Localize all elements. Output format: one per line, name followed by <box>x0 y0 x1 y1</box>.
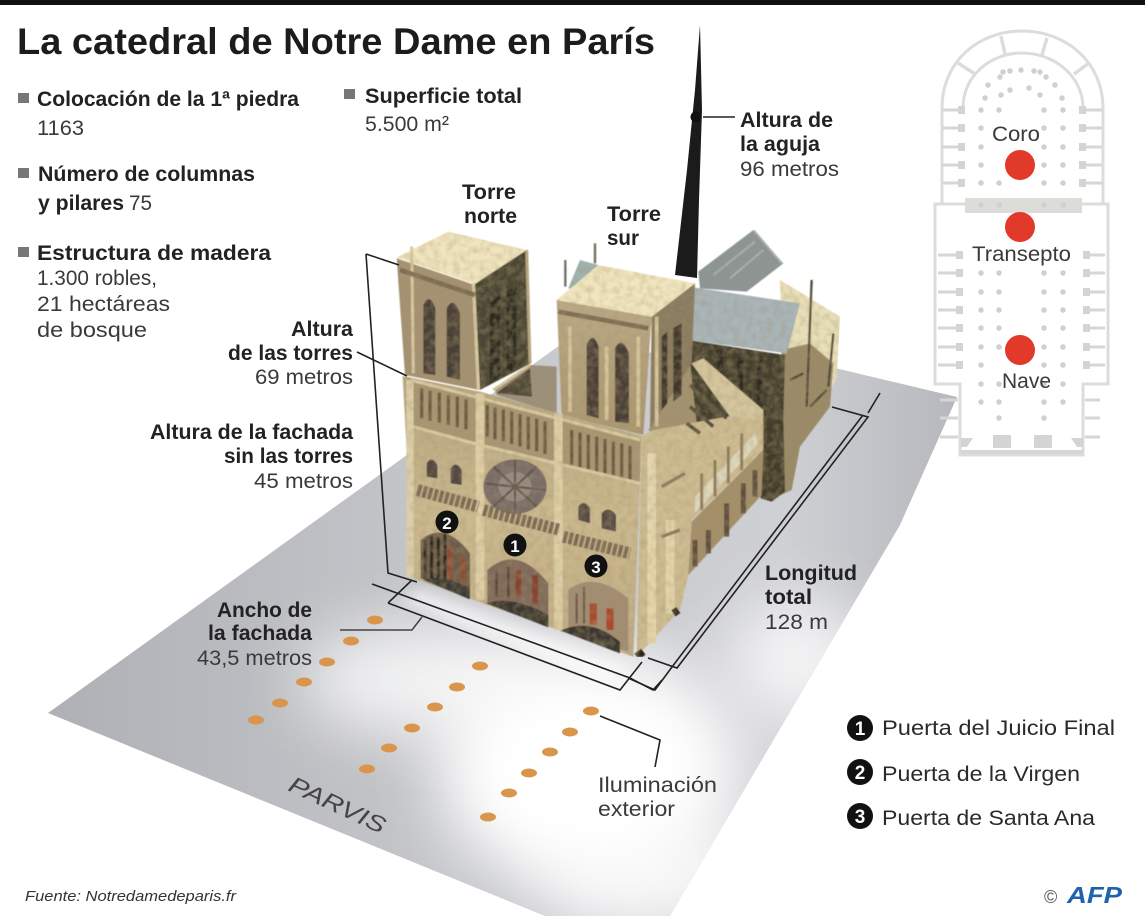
label: total length: 128 m <box>765 610 828 634</box>
label: exterior lighting <box>598 773 717 821</box>
nave roof <box>688 287 800 353</box>
label: facade width <box>197 599 312 670</box>
label: north tower: Torre <box>462 181 516 204</box>
label: south tower: Torre <box>607 203 661 226</box>
copyright and AFP logo: AFP <box>1066 882 1123 908</box>
label: tower height <box>228 318 353 389</box>
label: total length: Longitud <box>765 562 857 585</box>
cathedral 3D model <box>397 230 840 657</box>
label: spire height <box>740 109 839 181</box>
label: facade height: 45 metros <box>254 469 353 493</box>
fact: first stone <box>18 88 299 140</box>
south side of nave <box>637 358 763 657</box>
source: Fuente: Notredamedeparis.fr <box>25 888 237 905</box>
fact: timber structure: de bosque <box>37 318 147 342</box>
label: exterior lighting: exterior <box>598 797 675 821</box>
plan markers and labels: Coro <box>992 122 1040 146</box>
transept dark column <box>757 417 785 502</box>
fact: columns: y pilares <box>38 192 124 215</box>
plan markers and labels: Nave <box>1002 369 1051 393</box>
label: PARVIS: PARVIS <box>285 771 391 839</box>
label: facade height: sin las torres <box>224 445 353 468</box>
south tower <box>557 265 695 435</box>
fact: columns: Número de columnas <box>38 163 255 186</box>
label: exterior lighting: Iluminación <box>598 773 717 797</box>
label: south tower: sur <box>607 227 639 250</box>
label: spire height: la aguja <box>740 133 820 156</box>
gallery of arches <box>422 388 630 482</box>
label: north tower: norte <box>464 205 517 228</box>
fact: columns: 75 <box>129 191 152 215</box>
fact: columns <box>18 163 255 215</box>
legend: doors: 1 <box>855 719 866 740</box>
label: spire height: 96 metros <box>740 157 839 181</box>
title: La catedral de Notre Dame en París <box>17 21 655 62</box>
upper small windows <box>427 460 616 532</box>
floor plan of the cathedral <box>935 31 1108 455</box>
label: total length <box>765 562 857 634</box>
copyright and AFP logo <box>1044 882 1123 908</box>
door numbers on facade: 1 <box>510 537 520 556</box>
north portal <box>421 532 470 599</box>
fact: timber structure: 21 hectáreas <box>37 292 170 316</box>
fact: surface: 5.500 m² <box>365 112 449 136</box>
fact: timber structure: 1.300 robles, <box>37 266 157 290</box>
rose window <box>483 459 547 514</box>
door numbers on facade: 3 <box>591 558 601 577</box>
west facade <box>403 376 642 657</box>
dimension lines <box>340 117 880 767</box>
label: north tower <box>462 181 517 228</box>
top black bar <box>0 0 1145 5</box>
fact: surface: Superficie total <box>365 85 522 108</box>
label: south tower <box>607 203 661 250</box>
fact: timber structure: Estructura de madera <box>37 242 271 265</box>
legend: doors <box>847 715 1115 830</box>
legend: doors: 3 <box>855 807 865 828</box>
north tower <box>397 232 531 390</box>
label: spire height: Altura de <box>740 109 833 132</box>
label: facade height: Altura de la fachada <box>150 421 353 444</box>
south portal <box>561 582 628 653</box>
door numbers on facade <box>436 510 608 578</box>
ground: parvis plane <box>40 340 970 918</box>
plan markers and labels: Transepto <box>972 242 1071 266</box>
band of kings <box>417 490 630 553</box>
apse and far roof <box>698 230 840 500</box>
legend: doors: Puerta de Santa Ana <box>882 806 1095 830</box>
label: facade width: la fachada <box>208 622 312 645</box>
fact: first stone: Colocación de la 1ª piedra <box>37 88 299 111</box>
copyright and AFP logo: © <box>1044 887 1057 907</box>
exterior lights <box>248 616 599 822</box>
small roof behind south tower <box>565 243 610 290</box>
gallery link between towers <box>493 365 557 413</box>
legend: doors: Puerta del Juicio Final <box>882 716 1115 740</box>
plan markers and labels <box>972 122 1071 393</box>
label: tower height: de las torres <box>228 342 353 365</box>
label: facade width: Ancho de <box>217 599 312 622</box>
legend: doors: Puerta de la Virgen <box>882 762 1080 786</box>
fact: timber structure <box>18 242 271 342</box>
label: tower height: Altura <box>291 318 353 341</box>
nave upper wall <box>688 340 785 450</box>
legend: doors: 2 <box>855 763 865 784</box>
fact: first stone: 1163 <box>37 116 84 140</box>
door numbers on facade: 2 <box>442 514 452 533</box>
fact: surface <box>344 85 522 136</box>
label: facade height <box>150 421 353 493</box>
label: facade width: 43,5 metros <box>197 646 312 670</box>
spire <box>675 25 702 278</box>
spire marker <box>690 112 702 122</box>
central portal <box>486 559 548 627</box>
label: tower height: 69 metros <box>255 365 353 389</box>
label: total length: total <box>765 586 812 609</box>
